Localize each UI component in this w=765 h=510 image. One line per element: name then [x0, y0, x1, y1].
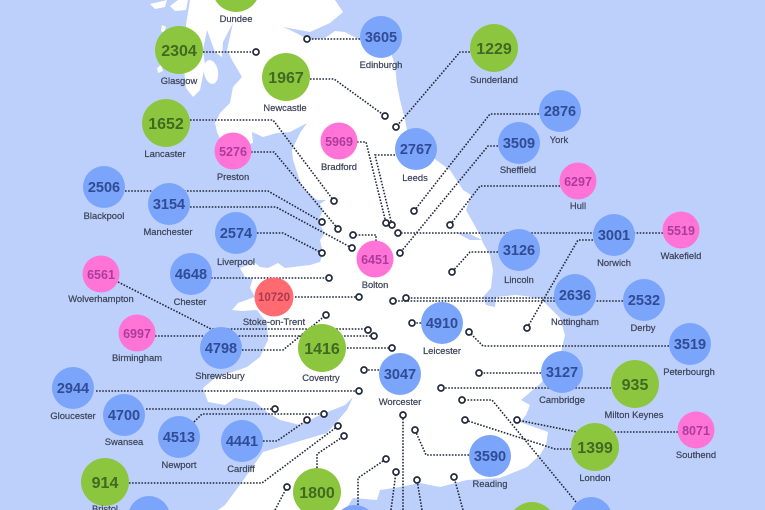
city: Sheffield	[498, 122, 540, 175]
city: Wakefield	[661, 212, 701, 261]
connector: Liverpool	[257, 233, 325, 256]
city: Blackpool: 2506	[88, 180, 120, 196]
city: Bristol: 914	[92, 475, 118, 492]
connector: Nottingham	[403, 295, 555, 301]
city: Newport: 4513	[163, 430, 195, 446]
city: Hull: Hull	[570, 200, 586, 211]
city: Leeds: Leeds	[402, 172, 428, 183]
city: Swansea: 4700	[108, 408, 140, 424]
connector: Newcastle	[310, 79, 388, 119]
city: London: 1399	[577, 440, 613, 457]
city: Edinburgh: Edinburgh	[360, 59, 402, 70]
city: Edinburgh	[360, 16, 402, 70]
connector: Norwich	[524, 240, 593, 331]
city: Dundee	[212, 0, 260, 24]
city: Lancaster: Lancaster	[144, 148, 186, 159]
city: Gloucester: Gloucester	[50, 410, 96, 421]
connector: Lancaster	[190, 120, 337, 204]
city: Sunderland: 1229	[476, 41, 512, 58]
city: Leicester: Leicester	[423, 345, 461, 356]
city: Cambridge	[539, 351, 585, 405]
city: Derby	[623, 279, 665, 333]
city: Newcastle: Newcastle	[263, 102, 307, 113]
city: Wakefield: Wakefield	[661, 250, 701, 261]
city: Norwich	[593, 214, 635, 268]
city: Lincoln	[498, 229, 540, 285]
connector: Edinburgh	[304, 36, 360, 42]
connector: Southend	[514, 417, 678, 432]
city: Lancaster	[142, 99, 190, 159]
connector: Manchester	[190, 207, 355, 251]
city: Coventry: Coventry	[302, 372, 340, 383]
connector: Bolton	[350, 232, 376, 241]
city: Birmingham: Birmingham	[112, 352, 162, 363]
city: Leeds	[395, 128, 437, 183]
city: Birmingham: 6997	[123, 327, 151, 341]
city: green 1800: 1800	[299, 485, 335, 502]
city: London: London	[579, 472, 611, 483]
connector: Lincoln	[449, 252, 498, 275]
city: Gloucester	[50, 367, 96, 421]
connector: Preston	[251, 152, 341, 232]
city: York: 2876	[544, 104, 576, 120]
city: blue lower centre	[334, 505, 376, 510]
city: Southend: 8071	[682, 424, 710, 438]
city: Chester: 4648	[175, 267, 207, 283]
city: green lower right	[508, 502, 556, 510]
city: Liverpool: 2574	[220, 226, 252, 242]
city: Cambridge: Cambridge	[539, 394, 585, 405]
city: Sunderland: Sunderland	[470, 74, 518, 85]
city: Stoke-on-Trent: Stoke-on-Trent	[243, 316, 305, 327]
city: Swansea	[103, 394, 145, 447]
city: Worcester	[379, 353, 421, 407]
city: Reading: Reading	[473, 478, 507, 489]
city: Liverpool	[215, 212, 257, 267]
city: Worcester: Worcester	[379, 396, 421, 407]
city: York	[539, 90, 581, 145]
connector: 1800	[317, 433, 347, 468]
city: Birmingham	[112, 314, 162, 363]
connector: Gloucester	[96, 388, 362, 394]
city: Newcastle	[262, 53, 310, 113]
city: Milton Keynes: Milton Keynes	[605, 409, 664, 420]
connector: Chester	[211, 275, 332, 281]
city: Lincoln: Lincoln	[504, 274, 534, 285]
city: Cardiff	[221, 420, 263, 474]
city: Norwich: 3001	[598, 228, 630, 244]
connector: Bristol	[129, 423, 341, 483]
city: blue lower left	[128, 496, 170, 510]
city: Sheffield: 3509	[503, 136, 535, 152]
city: Liverpool: Liverpool	[217, 256, 255, 267]
city: Preston	[214, 132, 252, 182]
city: Shrewsbury: 4798	[205, 341, 237, 357]
connector: Glasgow	[203, 49, 259, 55]
city: Dundee: Dundee	[220, 13, 252, 24]
city: Leicester	[421, 302, 463, 356]
city: Newport	[158, 416, 200, 470]
city: Stoke-on-Trent	[243, 278, 305, 327]
connector: Derby	[390, 298, 623, 304]
city: Lincoln: 3126	[503, 243, 535, 259]
city: Glasgow	[155, 26, 203, 86]
city: Cambridge: 3127	[546, 365, 578, 381]
island: Arran	[202, 59, 220, 85]
connector: Sunderland	[393, 52, 473, 130]
city: Shrewsbury: Shrewsbury	[195, 370, 245, 381]
connector: south 6	[275, 484, 290, 510]
connector: York	[411, 114, 539, 214]
connector: Leicester	[409, 320, 421, 326]
city: York: York	[550, 134, 569, 145]
connector: Reading	[412, 427, 469, 455]
connector: south 4	[451, 474, 463, 510]
city: Gloucester: 2944	[57, 381, 89, 397]
city: Derby: 2532	[628, 293, 660, 309]
city: Wolverhampton: Wolverhampton	[68, 293, 134, 304]
city: Wakefield: 5519	[667, 224, 695, 238]
city: Leicester: 4910	[426, 316, 458, 332]
city: Glasgow: 2304	[161, 43, 197, 60]
city: Peterborough: Peterbourgh	[663, 366, 715, 377]
connector: Leeds	[375, 155, 395, 228]
city: Bolton: 6451	[361, 253, 389, 267]
city: Glasgow: Glasgow	[161, 75, 197, 86]
connector: London	[462, 417, 571, 449]
city: Manchester: 3154	[153, 197, 185, 213]
city: Edinburgh: 3605	[365, 30, 397, 46]
city: Wolverhampton: 6561	[87, 268, 115, 282]
city: Lancaster: 1652	[148, 116, 184, 133]
city: Sunderland	[470, 24, 518, 85]
map: Great Britain	[150, 0, 565, 510]
connector: Swansea	[146, 406, 278, 412]
islands: Inner Hebrides	[150, 0, 188, 73]
city: Cardiff: Cardiff	[227, 463, 255, 474]
city: blue lower right	[570, 497, 612, 510]
connector: Newport	[194, 411, 327, 422]
city: Cardiff: 4441	[226, 434, 258, 450]
city: Bradford: 5969	[325, 135, 353, 149]
city: Coventry: 1416	[304, 341, 340, 358]
city: Sheffield: Sheffield	[500, 164, 536, 175]
city: Southend: Southend	[676, 449, 716, 460]
city: Newcastle: 1967	[268, 70, 304, 87]
connector: south 1	[400, 412, 406, 510]
city: Peterborough: 3519	[674, 337, 706, 353]
city: Manchester: Manchester	[144, 226, 192, 237]
connector: Stoke-on-Trent	[295, 294, 362, 300]
city: Stoke-on-Trent: 10720	[258, 292, 290, 304]
connector: Shrewsbury	[242, 312, 329, 350]
city: Southend	[676, 412, 716, 460]
city: London	[571, 423, 619, 483]
connector: Wolverhampton	[118, 282, 371, 333]
connector: Hull	[447, 186, 560, 228]
city: Newport: Newport	[162, 459, 197, 470]
city: Bradford	[320, 122, 358, 172]
city: green 1800	[293, 468, 341, 510]
city: Bradford: Bradford	[321, 161, 357, 172]
city: Hull	[560, 162, 596, 211]
connector: south 2	[391, 469, 399, 510]
connector: lower right city	[459, 397, 576, 502]
city: Manchester	[144, 183, 192, 237]
city: Blackpool: Blackpool	[84, 210, 124, 221]
city: Leeds: 2767	[400, 142, 432, 158]
city: Reading: 3590	[474, 449, 506, 465]
connector: Birmingham	[155, 333, 377, 339]
city: Bolton	[356, 240, 394, 290]
city: Blackpool	[83, 166, 125, 221]
city: Coventry	[298, 324, 346, 383]
city: Swansea: Swansea	[105, 436, 144, 447]
city: Worcester: 3047	[384, 367, 416, 383]
city: Peterborough	[663, 323, 715, 377]
estuary: Humber	[455, 232, 482, 240]
connector: Wakefield	[395, 230, 663, 236]
city: Reading	[469, 435, 511, 489]
city: Wolverhampton	[68, 256, 134, 304]
city: Chester: Chester	[174, 296, 206, 307]
city: Hull: 6297	[564, 175, 592, 189]
city: Derby: Derby	[630, 322, 656, 333]
city: Nottingham: 2636	[559, 288, 591, 304]
city: Preston: Preston	[217, 171, 249, 182]
connector: Coventry	[347, 345, 395, 351]
city: Nottingham: Nottingham	[551, 316, 599, 327]
connector: Peterborough	[466, 329, 669, 346]
city: Chester	[170, 253, 212, 307]
connector: Cardiff	[263, 417, 310, 441]
city: Nottingham	[551, 274, 599, 327]
city: Bolton: Bolton	[362, 279, 388, 290]
connector: south 5	[358, 456, 389, 505]
connector: Bradford	[357, 142, 389, 226]
city: Milton Keynes: 935	[622, 377, 648, 394]
city: Milton Keynes	[605, 360, 664, 420]
connector: Sheffield	[397, 146, 498, 256]
city: Norwich: Norwich	[597, 257, 631, 268]
connector: Worcester	[361, 367, 379, 373]
city: Preston: 5276	[219, 145, 247, 159]
connector: Milton Keynes	[438, 385, 611, 391]
connector: south 3	[414, 477, 422, 510]
city: Bristol	[81, 458, 129, 510]
connector: Blackpool	[125, 191, 325, 225]
connector: Cambridge	[476, 370, 541, 376]
city: Shrewsbury	[195, 327, 245, 381]
